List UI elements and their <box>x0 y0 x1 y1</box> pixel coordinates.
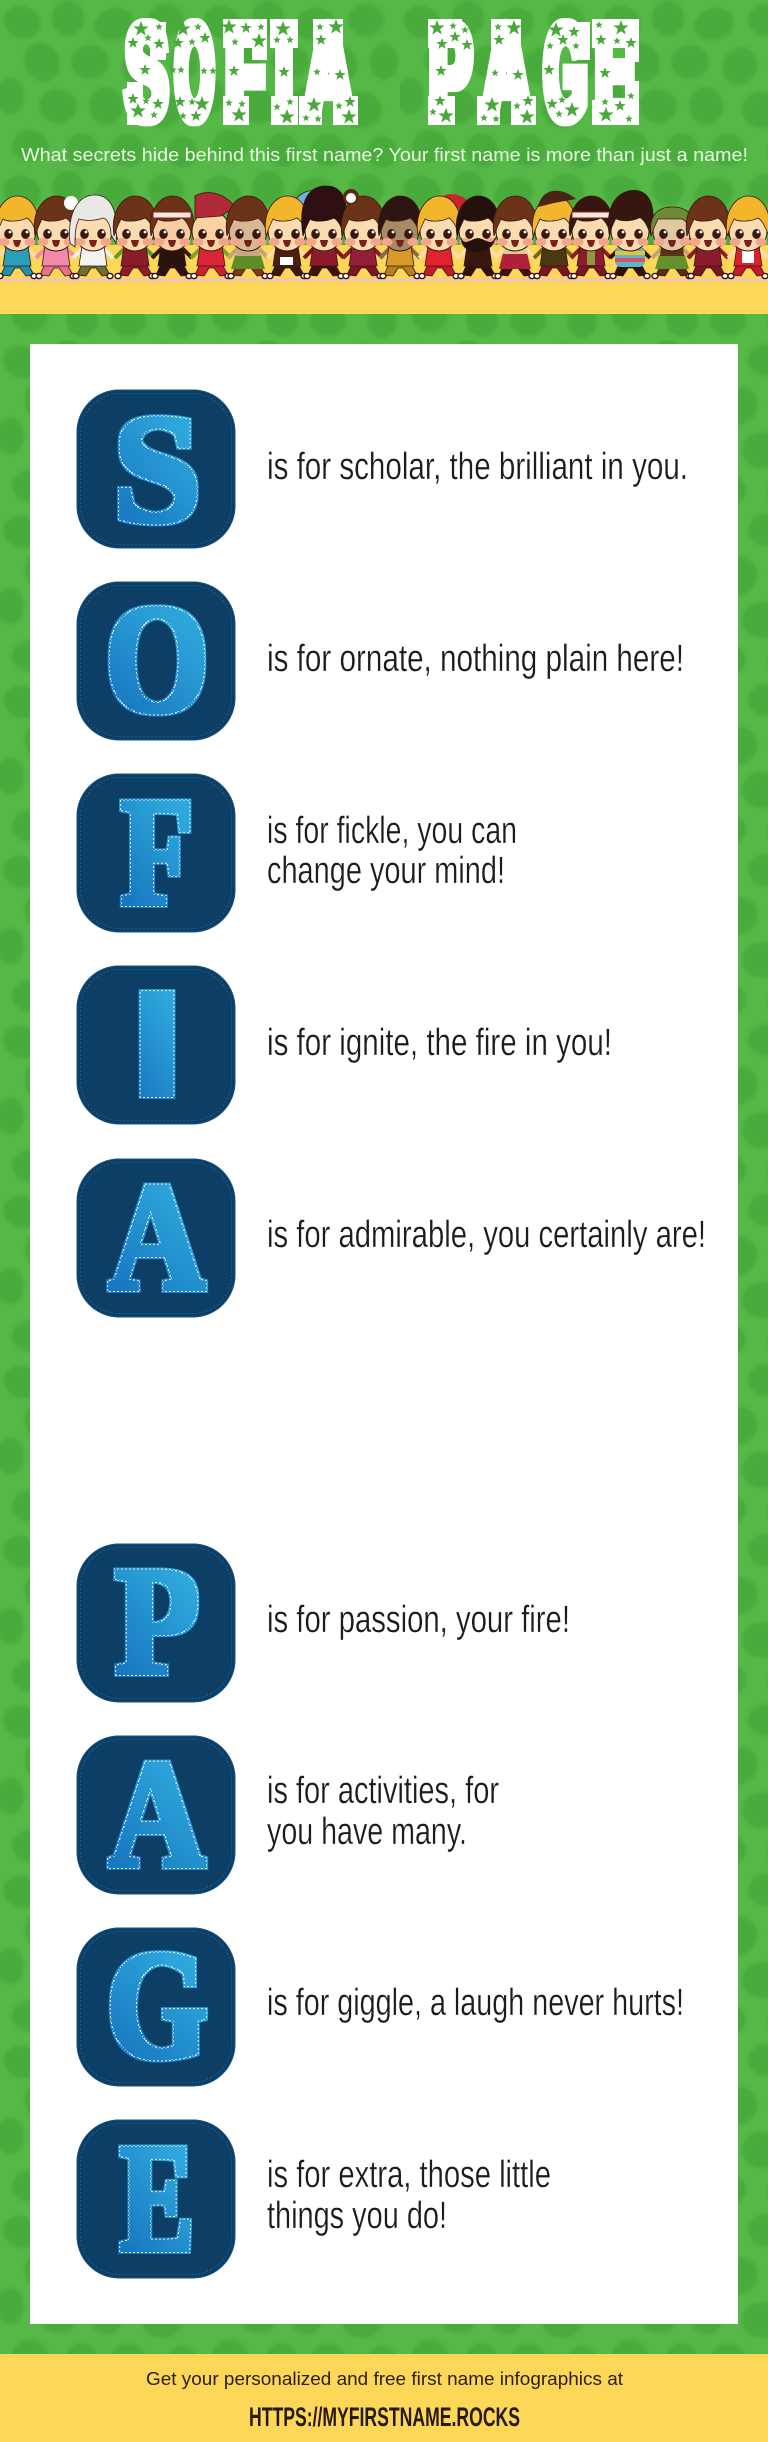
row P <box>77 1535 570 1707</box>
icon: letter I <box>77 962 235 1127</box>
row I <box>77 962 612 1127</box>
title: SOFIA PAGE with stars: E <box>596 0 635 149</box>
icon: letter G <box>77 1918 235 2091</box>
text: A meaning: you have many. <box>267 1811 467 1853</box>
footer url: HTTPS://MYFIRSTNAME.ROCKS <box>249 2402 520 2432</box>
row O <box>77 574 684 745</box>
title slab blocks <box>127 19 639 125</box>
text: E meaning <box>267 2154 551 2237</box>
row S <box>77 384 688 555</box>
text: F meaning: is for fickle, you can <box>267 810 517 852</box>
child 10 <box>341 189 385 279</box>
child 16 <box>569 196 613 279</box>
text: I meaning: is for ignite, the fire in you! <box>267 1022 612 1064</box>
panel: white content card <box>30 344 738 2324</box>
title: SOFIA PAGE with stars: A <box>482 0 531 148</box>
child 6 <box>191 193 235 279</box>
text: F meaning <box>267 810 517 892</box>
icon: letter O: O <box>105 574 209 745</box>
icon: letter A: A <box>109 1729 205 1900</box>
child 5 <box>150 196 194 279</box>
child 9 <box>302 186 347 279</box>
row A <box>77 1152 706 1323</box>
icon: letter I: I <box>129 962 185 1127</box>
row A second <box>77 1729 499 1900</box>
icon: letter P: P <box>115 1535 199 1707</box>
child 20 <box>726 196 768 279</box>
icon: letter O <box>77 574 235 745</box>
icon: letter G: G <box>106 1918 208 2091</box>
text: F meaning: change your mind! <box>267 850 505 892</box>
text: E meaning: is for extra, those little <box>267 2154 551 2196</box>
child 8 <box>265 191 321 279</box>
title: SOFIA PAGE with stars: S <box>126 0 167 149</box>
subtitle: What secrets hide behind this first name? Your first name is more than just a name! <box>21 144 748 165</box>
title: SOFIA PAGE with stars <box>126 0 639 149</box>
text: A meaning: is for activities, for <box>267 1770 499 1812</box>
child 7 <box>226 196 270 279</box>
child 12 <box>417 194 471 279</box>
illustration: parade of children holding hands <box>0 186 768 279</box>
icon: letter A <box>77 1152 235 1323</box>
text: P meaning: is for passion, your fire! <box>267 1599 570 1641</box>
child 17 <box>608 190 654 279</box>
stars on title letters <box>127 19 637 123</box>
row F <box>77 766 517 938</box>
child 14 <box>493 196 537 279</box>
title: SOFIA PAGE with stars: P <box>430 0 471 149</box>
text: E meaning: things you do! <box>267 2195 447 2237</box>
footer text: Get your personalized and free first name infographics at <box>146 2368 623 2389</box>
title: SOFIA PAGE with stars: I <box>276 0 292 149</box>
child 1 <box>0 196 39 279</box>
child 15 <box>532 191 576 279</box>
child 19 <box>686 196 730 279</box>
icon: letter A <box>77 1729 235 1900</box>
child 11 <box>378 196 422 279</box>
icon: letter P <box>77 1535 235 1707</box>
footer band <box>0 2354 768 2442</box>
icon: letter S: S <box>113 384 201 555</box>
child 2 <box>34 196 78 279</box>
icon: letter F: F <box>121 766 193 938</box>
icon: letter E: E <box>120 2113 194 2285</box>
row E <box>77 2113 551 2285</box>
yellow ground band <box>0 245 768 314</box>
text: A meaning <box>267 1770 499 1853</box>
icon: letter A: A <box>109 1152 205 1323</box>
child 18 <box>651 207 694 279</box>
child 3 <box>70 195 117 279</box>
icon: letter F <box>77 766 235 938</box>
title: SOFIA PAGE with stars: F <box>226 0 264 149</box>
icon: letter S <box>77 384 235 555</box>
row G <box>77 1918 684 2091</box>
title: SOFIA PAGE with stars: G <box>544 0 587 148</box>
child 4 <box>113 196 157 279</box>
title: SOFIA PAGE with stars: A <box>304 0 353 148</box>
child 13 <box>456 196 500 279</box>
icon: letter E <box>77 2113 235 2285</box>
